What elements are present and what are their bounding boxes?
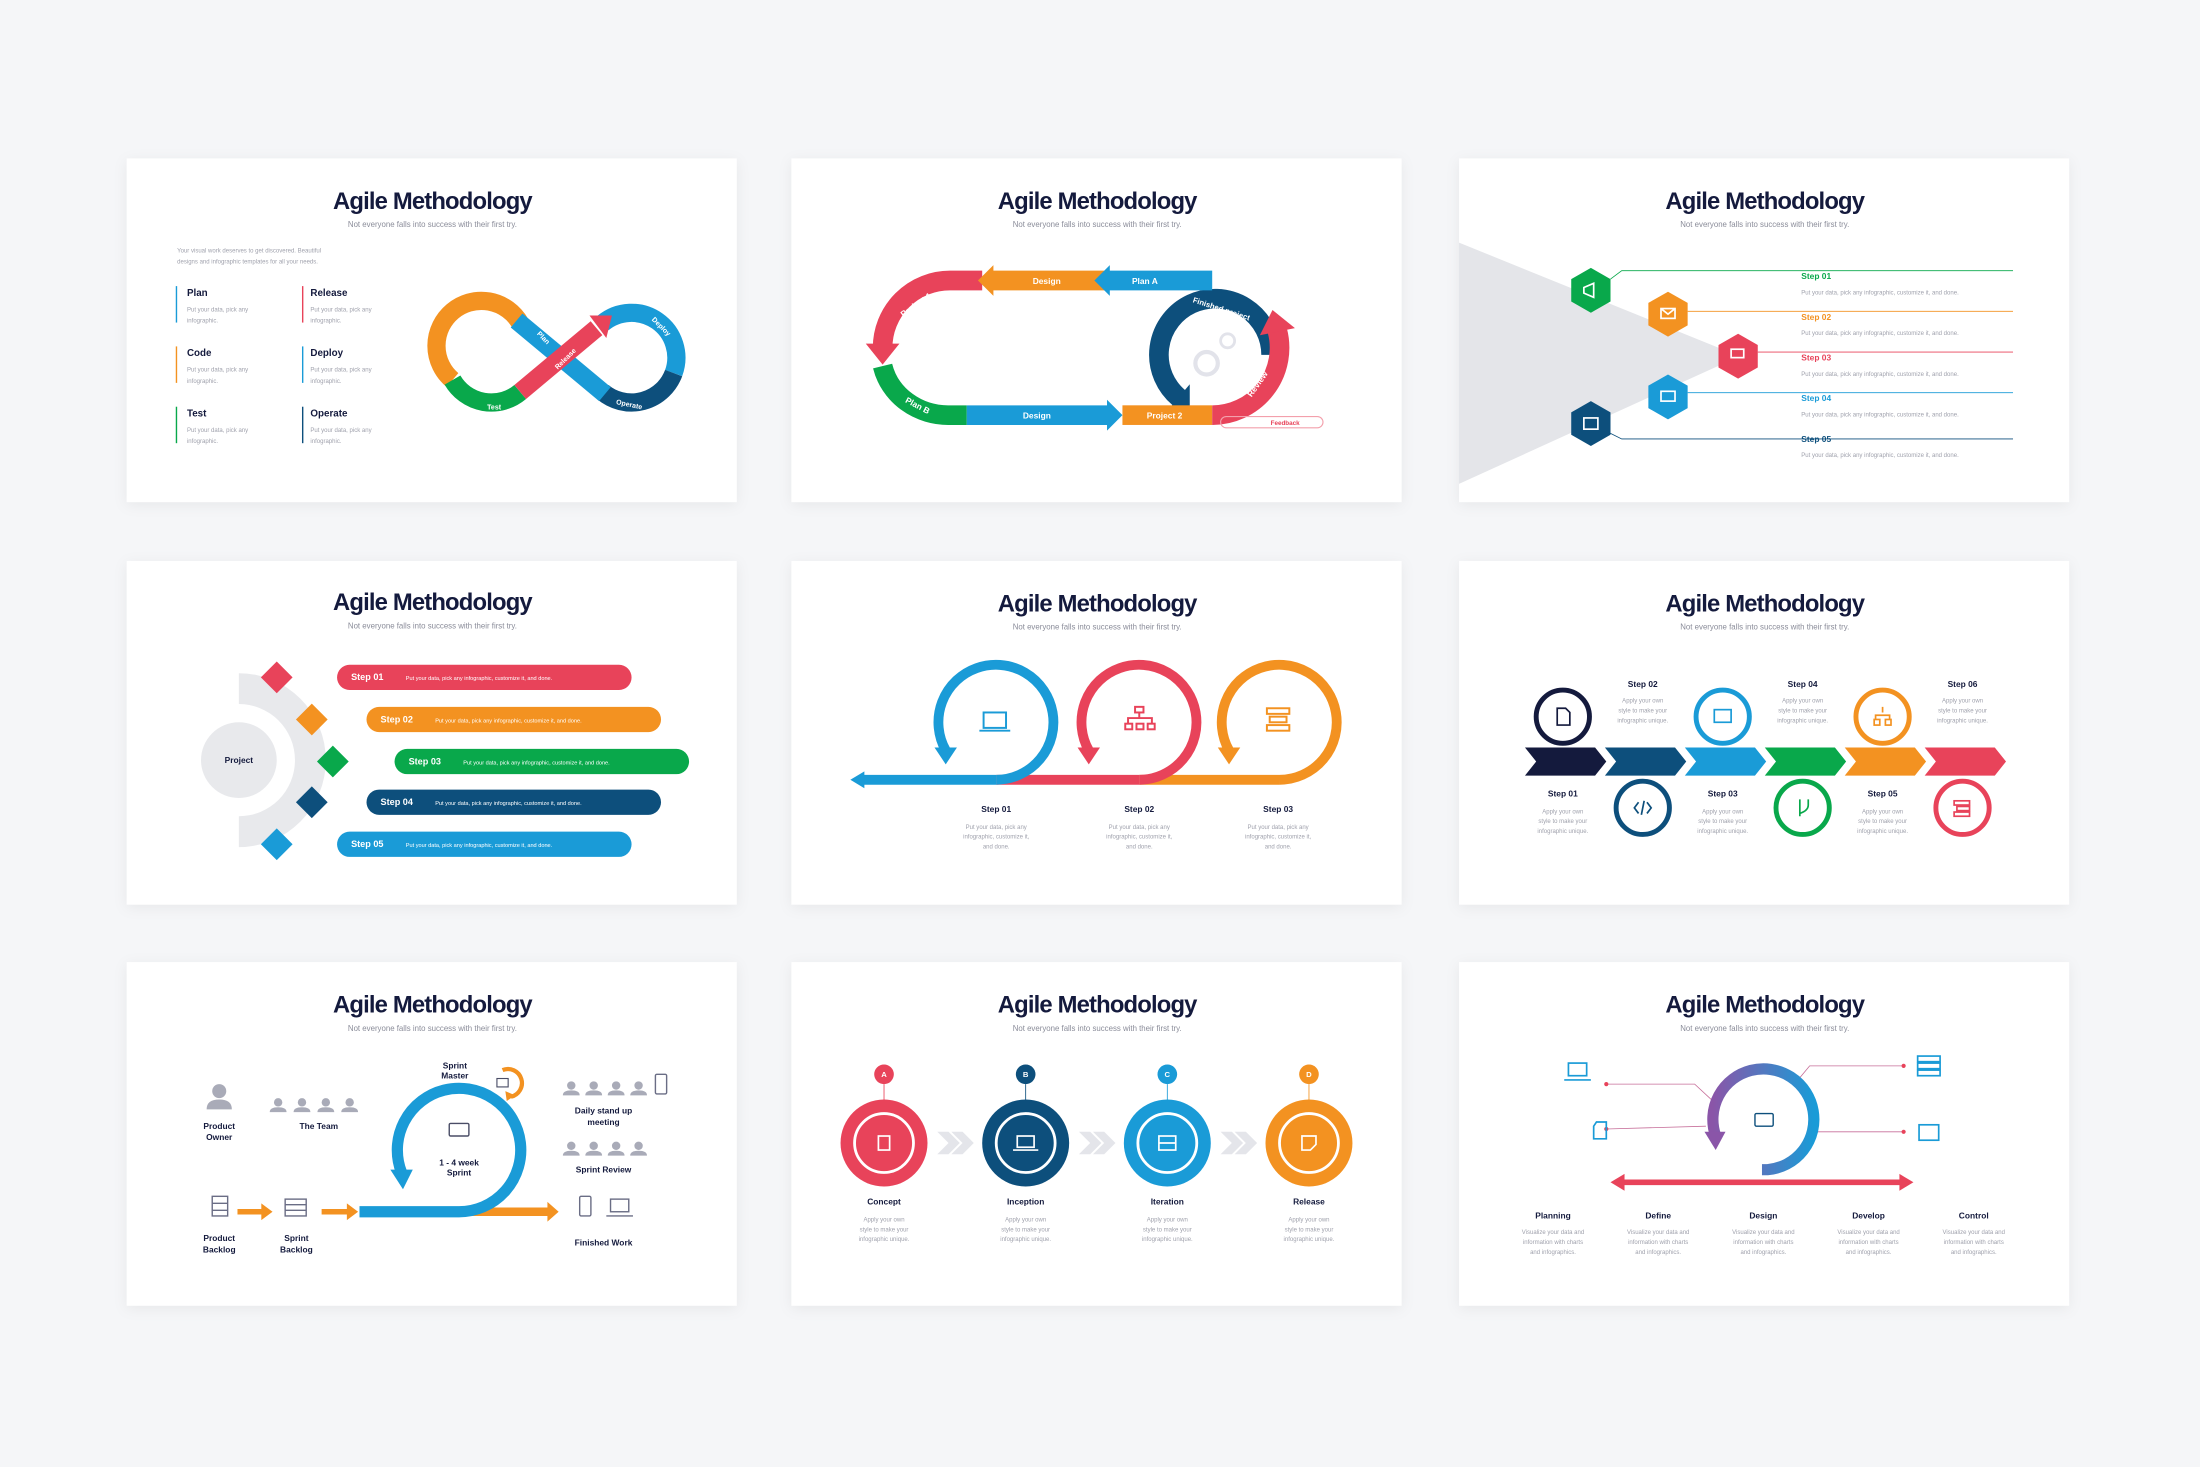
title: Agile Methodology [333, 188, 533, 215]
list items: Put your data, pick any [310, 368, 372, 374]
step labels: infographic, customize it, [963, 835, 1030, 841]
hexagon steps: Step 02 [1801, 312, 1831, 322]
text labels: Backlog [203, 1244, 236, 1254]
list items: Put your data, pick any [310, 428, 372, 434]
step pills: Step 01 [351, 672, 383, 682]
step pills: Step 05 [351, 839, 383, 849]
title: Agile Methodology [1665, 188, 1866, 215]
phase labels: infographic unique. [1284, 1237, 1335, 1243]
phase labels [859, 1197, 1335, 1243]
loop diagram: Plan B [904, 395, 932, 416]
step labels: Step 03 [1263, 804, 1293, 814]
chevrons [1525, 748, 2006, 776]
phase labels: information with charts [1944, 1240, 2004, 1246]
title: Agile Methodology [998, 590, 1198, 617]
panel: slide 1 infinity loop [127, 158, 737, 502]
panel: slide 6 chevron timeline [1459, 561, 2069, 905]
step labels: Put your data, pick any [1248, 825, 1309, 831]
step labels: infographic unique. [1537, 829, 1589, 835]
phase labels: Develop [1852, 1211, 1885, 1221]
phase labels: Apply your own [1147, 1218, 1188, 1224]
step labels: Step 03 [1708, 789, 1738, 799]
phase circles: D [1306, 1070, 1312, 1079]
step labels: Apply your own [1782, 699, 1823, 705]
diamonds [261, 662, 349, 860]
sprint loop: Sprint [447, 1167, 471, 1177]
step labels: Put your data, pick any [1109, 825, 1170, 831]
step labels: Apply your own [1542, 809, 1583, 815]
list items: Put your data, pick any [187, 428, 248, 434]
panel: slide 8 four phases [791, 962, 1402, 1306]
phase labels: Apply your own [863, 1218, 905, 1224]
hexagon steps: Put your data, pick any infographic, customize it, and done. [1801, 453, 1959, 459]
phase labels: and infographics. [1530, 1250, 1576, 1256]
phase labels: infographic unique. [1142, 1237, 1193, 1243]
step pills: Step 03 [409, 756, 441, 766]
phase labels: information with charts [1628, 1240, 1688, 1246]
phase labels: Visualize your data and [1522, 1230, 1584, 1236]
text labels: Backlog [280, 1244, 313, 1254]
infinity chart: Plan [535, 331, 551, 346]
sprint loop: Master [441, 1071, 469, 1081]
hexagon steps [1571, 268, 2013, 459]
loop diagram: Review [1245, 369, 1270, 399]
list items: Put your data, pick any [187, 307, 248, 313]
project hub [201, 673, 326, 847]
list items: Code [187, 348, 212, 359]
hexagon steps: Put your data, pick any infographic, customize it, and done. [1801, 372, 1959, 378]
panel: slide 7 scrum sprint [127, 962, 737, 1306]
step labels: style to make your [1618, 708, 1667, 714]
panel: slide 4 project steps [127, 561, 737, 905]
list items: infographic. [187, 319, 218, 325]
hexagon steps: Put your data, pick any infographic, customize it, and done. [1801, 291, 1959, 297]
list items: Operate [310, 409, 348, 420]
phase labels: Visualize your data and [1943, 1230, 2005, 1236]
phase labels: Apply your own [1005, 1218, 1046, 1224]
step labels: Step 02 [1628, 679, 1658, 689]
list items: Plan [187, 288, 208, 299]
list items [176, 286, 372, 445]
loop diagram: Project 2 [1147, 411, 1183, 421]
list items: infographic. [187, 439, 218, 445]
phase circles [841, 1064, 1352, 1187]
step labels: Step 01 [1548, 789, 1578, 799]
phase labels: Apply your own [1288, 1218, 1330, 1224]
phase labels: Release [1293, 1197, 1325, 1207]
step labels: infographic, customize it, [1245, 835, 1312, 841]
step labels: Step 04 [1788, 679, 1818, 689]
subtitle: Not everyone falls into success with their first try. [1013, 220, 1182, 229]
sprint loop: 1 - 4 week [439, 1157, 479, 1167]
step pills: Put your data, pick any infographic, customize it, and done. [435, 718, 582, 724]
phase labels: Concept [867, 1197, 901, 1207]
text labels: Product [203, 1233, 235, 1243]
phase labels: and infographics. [1951, 1250, 1997, 1256]
subtitle: Not everyone falls into success with their first try. [1013, 1024, 1182, 1033]
sprint loop: Sprint [443, 1061, 467, 1071]
step labels: and done. [1126, 845, 1153, 851]
text labels: The Team [300, 1121, 338, 1131]
intro text [177, 248, 321, 266]
title: Agile Methodology [998, 992, 1198, 1019]
phase labels: and infographics. [1846, 1250, 1892, 1256]
subtitle: Not everyone falls into success with their first try. [1680, 623, 1849, 632]
infinity chart [436, 301, 676, 412]
title: Agile Methodology [333, 589, 533, 616]
subtitle: Not everyone falls into success with their first try. [348, 1024, 517, 1033]
title: Agile Methodology [1665, 992, 1866, 1019]
step pills: Put your data, pick any infographic, customize it, and done. [406, 676, 553, 682]
step pills: Put your data, pick any infographic, customize it, and done. [463, 760, 610, 766]
connector lines and icons [1564, 1056, 1940, 1140]
step labels: Apply your own [1862, 809, 1903, 815]
step pills: Put your data, pick any infographic, customize it, and done. [435, 801, 582, 807]
title: Agile Methodology [333, 992, 533, 1019]
step labels: infographic, customize it, [1106, 835, 1173, 841]
step pills: Step 04 [381, 797, 414, 807]
step pills [337, 665, 689, 857]
step labels: and done. [983, 845, 1010, 851]
step pills: Put your data, pick any infographic, customize it, and done. [406, 843, 553, 849]
panel: slide 9 development loop [1459, 962, 2069, 1306]
subtitle: Not everyone falls into success with their first try. [1680, 1024, 1849, 1033]
phase labels: information with charts [1838, 1240, 1899, 1246]
list items: Release [310, 288, 348, 299]
phase labels: infographic unique. [1000, 1237, 1051, 1243]
phase labels: Planning [1535, 1211, 1571, 1221]
phase labels: style to make your [1285, 1227, 1333, 1233]
loop diagram [866, 265, 1323, 431]
phase labels: infographic unique. [859, 1237, 910, 1243]
phase labels: Control [1959, 1211, 1989, 1221]
step labels: style to make your [1858, 819, 1907, 825]
text labels: Daily stand up [575, 1106, 632, 1116]
phase circles: C [1165, 1070, 1171, 1079]
phase labels: Define [1645, 1211, 1671, 1221]
panel: slide 2 project loop [791, 158, 1402, 502]
step pills: Step 02 [381, 714, 413, 724]
phase labels: and infographics. [1635, 1250, 1681, 1256]
hexagon steps: Put your data, pick any infographic, customize it, and done. [1801, 331, 1959, 337]
step labels: infographic unique. [1697, 829, 1748, 835]
title: Agile Methodology [998, 188, 1198, 215]
infinity chart: Deploy [650, 316, 671, 338]
text labels [203, 1106, 633, 1254]
step labels [963, 804, 1312, 851]
hexagon steps: Step 04 [1801, 393, 1831, 403]
step labels: Step 06 [1948, 679, 1978, 689]
title: Agile Methodology [1665, 590, 1866, 617]
backlog flow [212, 1074, 667, 1220]
text labels: Product [203, 1121, 235, 1131]
phase labels: Visualize your data and [1837, 1230, 1900, 1236]
list items: Put your data, pick any [310, 307, 372, 313]
loop diagram: Design [1033, 276, 1061, 286]
phase circles: B [1023, 1070, 1029, 1079]
text labels: meeting [587, 1117, 620, 1127]
step labels: style to make your [1538, 819, 1587, 825]
infinity chart: Operate [615, 399, 643, 411]
list items: infographic. [310, 379, 342, 385]
phase labels: Design [1749, 1211, 1777, 1221]
chevron connectors [937, 1132, 1257, 1154]
people and labels [207, 1081, 647, 1156]
step labels: Put your data, pick any [966, 825, 1027, 831]
list items: Test [187, 409, 207, 420]
infinity chart: Code [445, 333, 459, 352]
list items: infographic. [187, 379, 218, 385]
loop diagram: Project 1 [899, 290, 934, 319]
list items: infographic. [310, 439, 342, 445]
step labels: Apply your own [1622, 699, 1663, 705]
hexagon steps: Step 05 [1801, 434, 1831, 444]
subtitle: Not everyone falls into success with their first try. [348, 621, 517, 630]
loop diagram: Finished project [1192, 296, 1251, 323]
step labels: style to make your [1938, 708, 1987, 714]
sprint loop [359, 1061, 559, 1222]
hexagon steps: Put your data, pick any infographic, customize it, and done. [1801, 413, 1959, 419]
step labels: infographic unique. [1777, 718, 1828, 724]
phase labels: and infographics. [1740, 1250, 1787, 1256]
intro text: designs and infographic templates for all your needs. [177, 260, 318, 266]
phase labels: Inception [1007, 1197, 1044, 1207]
text labels: Owner [206, 1132, 233, 1142]
infinity chart: Release [554, 347, 578, 371]
step labels: Apply your own [1702, 809, 1743, 815]
loop diagram: Design [1023, 411, 1051, 421]
subtitle: Not everyone falls into success with their first try. [348, 220, 517, 229]
phase labels: Iteration [1151, 1197, 1184, 1207]
step labels: and done. [1265, 845, 1292, 851]
subtitle: Not everyone falls into success with their first try. [1013, 623, 1182, 632]
hexagon steps: Step 01 [1801, 271, 1831, 281]
hexagon steps: Step 03 [1801, 352, 1831, 362]
intro text: Your visual work deserves to get discovered. Beautiful [177, 248, 321, 254]
infinity chart: Test [487, 405, 502, 412]
step circles [1536, 690, 1989, 834]
phase labels: Visualize your data and [1627, 1230, 1689, 1236]
step labels: Step 05 [1868, 789, 1898, 799]
step labels: infographic unique. [1617, 718, 1669, 724]
step labels: style to make your [1698, 819, 1747, 825]
loop diagram: Feedback [1271, 420, 1300, 427]
step labels [1537, 679, 1988, 835]
step labels: Apply your own [1942, 699, 1983, 705]
panel: slide 5 loops [791, 561, 1402, 905]
phase labels: Visualize your data and [1732, 1230, 1795, 1236]
phase labels: information with charts [1523, 1240, 1583, 1246]
phase labels: style to make your [860, 1227, 908, 1233]
step labels: style to make your [1778, 708, 1827, 714]
phase labels [1522, 1211, 2005, 1256]
text labels: Finished Work [575, 1237, 633, 1247]
list items: Put your data, pick any [187, 368, 248, 374]
loop and arrow [1611, 1069, 1913, 1191]
subtitle: Not everyone falls into success with their first try. [1680, 220, 1849, 229]
text labels: Sprint Review [576, 1164, 632, 1174]
step labels: infographic unique. [1857, 829, 1908, 835]
list items: Deploy [310, 348, 344, 359]
list items: infographic. [310, 319, 342, 325]
loop chart [850, 665, 1337, 788]
step labels: Step 02 [1124, 804, 1155, 814]
panel: slide 3 funnel hexagons [1459, 158, 2069, 502]
step labels: Step 01 [981, 804, 1011, 814]
project hub: Project [225, 755, 253, 765]
text labels: Sprint [284, 1233, 309, 1243]
loop diagram: Plan A [1132, 276, 1158, 286]
phase labels: information with charts [1733, 1240, 1793, 1246]
phase labels: style to make your [1143, 1227, 1192, 1233]
step labels: infographic unique. [1937, 718, 1988, 724]
phase circles: A [881, 1070, 887, 1079]
phase labels: style to make your [1001, 1227, 1050, 1233]
funnel [1459, 243, 1740, 484]
